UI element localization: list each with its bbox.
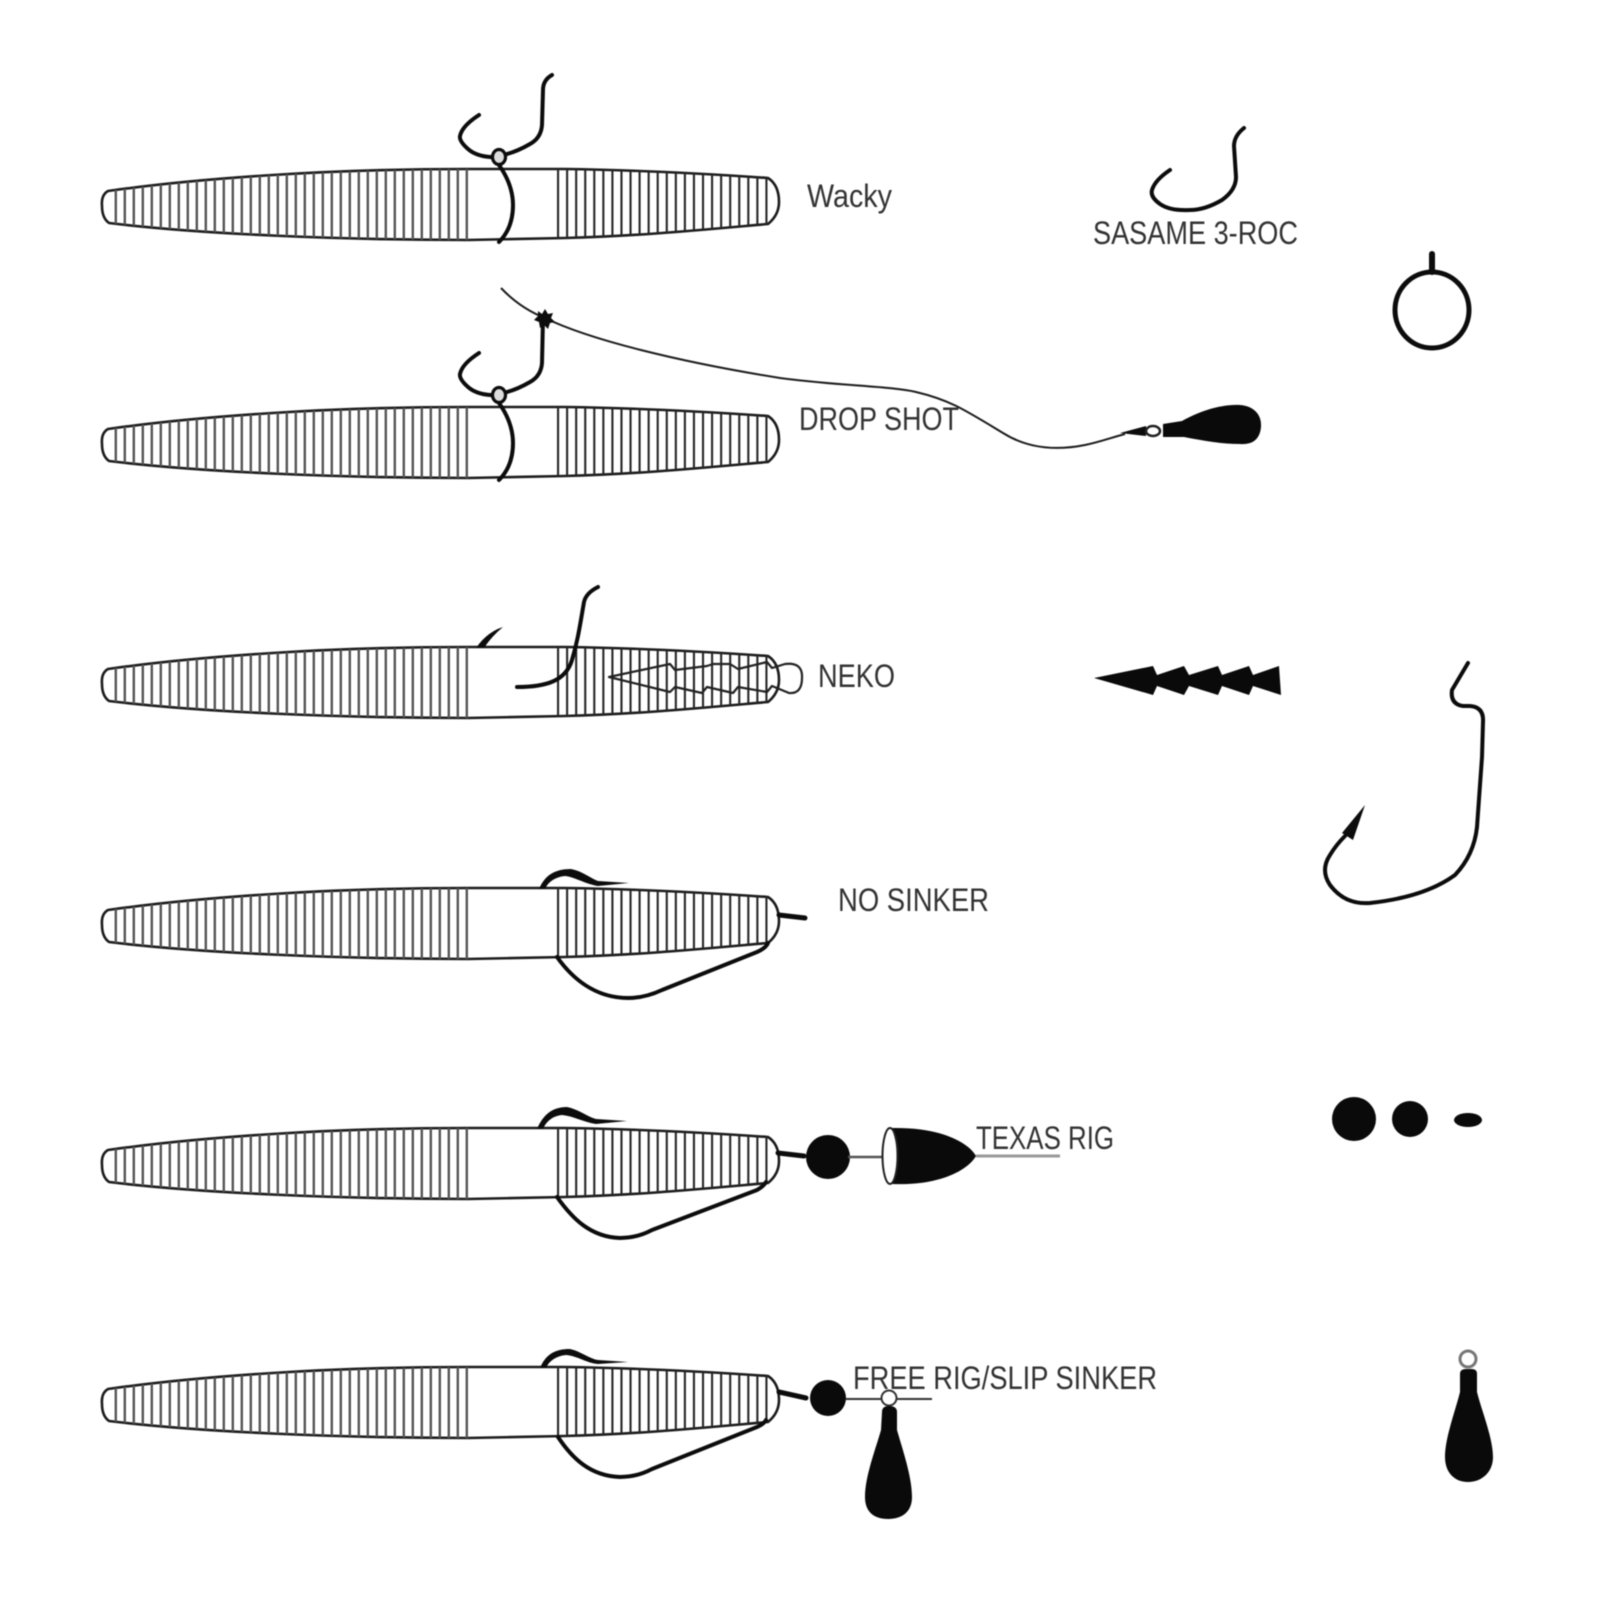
line tag <box>778 1153 804 1156</box>
line tag <box>779 1392 806 1398</box>
icon: ring <box>1395 254 1469 348</box>
worm body <box>102 407 779 478</box>
drop shot hook <box>460 318 543 480</box>
bullet weight <box>882 1128 976 1184</box>
offset hook, upper <box>540 1349 628 1368</box>
label: Drop Shot: DROP SHOT <box>799 401 959 437</box>
line <box>846 1398 932 1400</box>
worm body <box>102 169 779 240</box>
label: Sasame 3-ROC: SASAME 3-ROC <box>1093 215 1298 251</box>
offset hook, upper <box>537 1107 627 1129</box>
rig: wacky <box>102 75 892 242</box>
offset hook, upper <box>539 869 629 889</box>
worm body <box>102 1128 779 1199</box>
offset hook, lower <box>557 1182 766 1238</box>
neko hook point <box>476 627 503 648</box>
icon: offset worm hook <box>1325 663 1483 903</box>
label: No Sinker: NO SINKER <box>838 882 989 918</box>
neko hook shank <box>517 587 598 687</box>
rig: texas rig <box>102 1107 1114 1238</box>
line tag <box>779 915 805 918</box>
label: Wacky: Wacky <box>807 178 892 214</box>
knot <box>534 309 555 329</box>
fishing line <box>501 288 1125 448</box>
rig: no sinker <box>102 869 989 998</box>
icon: nail weight <box>1094 666 1281 695</box>
label: Texas Rig: TEXAS RIG <box>976 1120 1114 1156</box>
bead <box>806 1135 850 1179</box>
icon: slip sinker <box>1445 1351 1493 1482</box>
bead <box>810 1380 846 1416</box>
worm body <box>102 1367 779 1438</box>
worm body <box>102 647 779 718</box>
rig: drop shot <box>102 288 1261 480</box>
label underline <box>976 1154 1060 1158</box>
label: Free Rig / Slip Sinker: FREE RIG/SLIP SINKER <box>853 1360 1157 1396</box>
icon: beads <box>1332 1097 1482 1141</box>
offset hook, lower <box>557 943 768 998</box>
worm body <box>102 888 779 959</box>
embedded nail weight outline <box>609 662 802 693</box>
rig: neko <box>102 587 895 718</box>
slip sinker <box>865 1406 912 1519</box>
line between bead and weight <box>848 1156 890 1158</box>
swivel ring <box>882 1390 896 1406</box>
label: Neko: NEKO <box>818 658 895 694</box>
swivel and sinker <box>1120 405 1261 444</box>
standalone hook: Sasame <box>1093 128 1298 251</box>
offset hook, lower <box>558 1420 766 1477</box>
wacky hook through worm <box>460 75 552 242</box>
rig: free rig / slip sinker <box>102 1349 1157 1519</box>
